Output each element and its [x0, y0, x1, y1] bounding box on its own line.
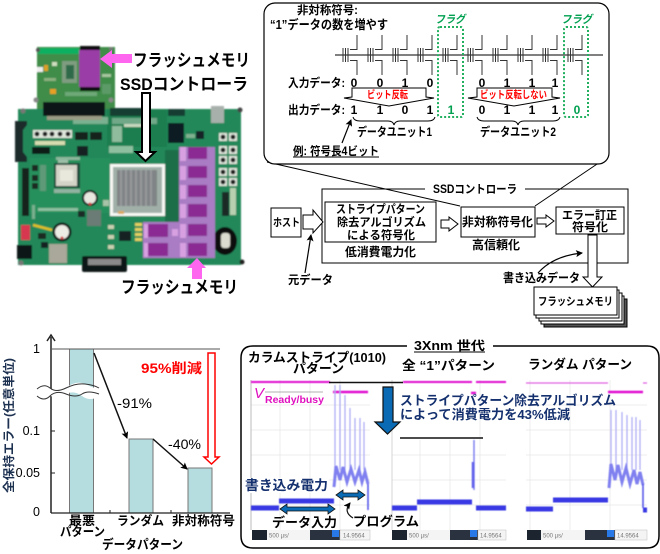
arrow: bit inversion — [344, 88, 434, 106]
output data row: 1 — [377, 103, 384, 117]
callout: 95 percent reduction — [141, 353, 219, 464]
arrow: no bit inversion — [468, 88, 560, 106]
box: stripe pattern removal — [325, 202, 436, 242]
box: error correction: 符号化 — [572, 220, 609, 234]
arrow: bit inversion: ビット反転 — [367, 88, 408, 101]
box: stripe pattern removal: による符号化 — [347, 228, 415, 242]
controller frame — [322, 183, 628, 263]
heat sink module — [110, 164, 165, 216]
axis break — [36, 383, 100, 399]
status bar: 500 µs/ — [409, 534, 429, 540]
diagram: SSD controller flow — [271, 183, 628, 327]
input data row — [288, 75, 559, 90]
input data row: 入力データ: — [288, 75, 345, 90]
arrow: to flash — [583, 235, 602, 287]
top connector — [43, 102, 105, 120]
input data row: 0 — [377, 76, 384, 90]
purple top chip — [79, 46, 100, 91]
x axis title: データパターン — [102, 537, 183, 552]
box: asymmetric coding — [461, 207, 535, 237]
input data row: 1 — [552, 76, 559, 90]
arrow: minus 91 percent: -91% — [117, 396, 152, 411]
box: error correction: エラー訂正 — [562, 209, 617, 222]
arrow: pink to bottom flash memory — [187, 258, 206, 279]
status bar — [392, 530, 506, 540]
label: write data: 書き込みデータ — [503, 270, 580, 285]
bar chart: retention errors — [1, 335, 235, 552]
flag 2: フラグ — [561, 13, 594, 26]
output data row: 1 — [448, 103, 455, 117]
output data row: 1 — [504, 103, 511, 117]
output data row: 0 — [479, 103, 486, 117]
text: increase 1 data: “1”データの数を増やす — [270, 17, 388, 32]
output data row: 1 — [529, 103, 536, 117]
y axis values: 0 — [33, 505, 40, 519]
label: write data — [503, 253, 582, 285]
main board — [17, 106, 244, 266]
label: V ready busy: V — [254, 385, 266, 402]
output data row — [288, 102, 581, 117]
arrow: data input span — [280, 504, 335, 514]
label: original data — [288, 235, 333, 287]
output data row: 出力データ: — [288, 102, 345, 117]
label: data input: データ入力 — [272, 515, 337, 530]
box: host — [271, 208, 301, 237]
label: flash memory top: フラッシュメモリ — [133, 51, 250, 70]
text: 43 percent reduction — [400, 393, 616, 422]
title: column stripe — [248, 350, 386, 376]
input data row: 0 — [427, 76, 434, 90]
input data row: 0 — [351, 76, 358, 90]
left connector — [15, 121, 27, 162]
status bar: 14.9564 — [343, 534, 365, 540]
label: V ready busy: Ready/busy — [265, 395, 324, 406]
label: SSD controller: SSDコントローラ — [120, 75, 248, 94]
label: flash memory bottom: フラッシュメモリ — [121, 278, 238, 297]
flash memory stack — [534, 287, 627, 327]
x axis labels: パターン — [60, 525, 105, 539]
input data row: 1 — [504, 76, 511, 90]
title: random: ランダム パターン — [528, 357, 632, 372]
x axis labels — [60, 513, 235, 539]
callout: 95 percent reduction: 95%削減 — [141, 360, 203, 376]
input data row: 1 — [402, 76, 409, 90]
title: column stripe: パターン — [293, 361, 344, 376]
arrow: code length — [342, 120, 351, 143]
flag 2 — [561, 13, 594, 117]
output data row: 1 — [427, 103, 434, 117]
x axis labels: ランダム — [117, 513, 164, 528]
callout: asymmetric coding — [264, 3, 609, 206]
title: all 1: 全 “1”パターン — [402, 358, 495, 373]
title: column stripe: カラムストライプ(1010) — [248, 350, 386, 365]
oscilloscope 3 — [526, 380, 647, 540]
arrow: host to encoding — [303, 210, 323, 233]
status bar — [252, 530, 370, 540]
y axis values — [16, 342, 40, 519]
output data row: 1 — [351, 103, 358, 117]
box: stripe pattern removal: ストライプパターン — [336, 203, 425, 216]
arrow: power reduction — [375, 387, 400, 434]
input data row: 1 — [529, 76, 536, 90]
text: code length example: 例: 符号長4ビット — [293, 144, 379, 158]
output data row: 0 — [574, 103, 581, 117]
text: low power: 低消費電力化 — [345, 244, 416, 259]
data unit 1: データユニット1 — [357, 124, 432, 139]
flag 1: フラグ — [435, 13, 467, 26]
text: high reliability: 高信頼化 — [472, 237, 520, 252]
label: program: プログラム — [353, 514, 419, 529]
panel: 3Xnm generation waveforms — [241, 339, 659, 548]
arrow: minus 91 percent — [94, 353, 152, 438]
photo: SSD controller board — [15, 46, 250, 297]
label: V ready busy — [254, 385, 324, 406]
oscilloscope 1 — [251, 380, 370, 540]
heading: 3Xnm generation: 3Xnm 世代 — [414, 339, 486, 353]
y axis title: 全保持エラー(任意単位) — [1, 358, 16, 493]
controller frame: SSDコントローラ — [433, 183, 517, 196]
box: error correction — [556, 207, 624, 234]
text: 43 percent reduction: ストライプパターン除去アルゴリズム — [400, 393, 616, 408]
flag 1 — [435, 13, 467, 117]
output data row: 1 — [552, 103, 559, 117]
arrow: program span — [336, 490, 365, 500]
daughter board — [34, 47, 115, 109]
oscilloscope 2 — [392, 380, 506, 540]
label: original data: 元データ — [288, 272, 333, 287]
x axis labels: 最悪 — [69, 514, 96, 528]
arrow: to ECC — [537, 215, 554, 227]
y axis values: 0.1 — [23, 424, 40, 438]
output data row: 0 — [402, 103, 409, 117]
data unit 2 — [477, 117, 560, 139]
text: 43 percent reduction: によって消費電力を43%低減 — [400, 407, 570, 422]
bottom connector — [82, 256, 127, 272]
status bar — [527, 530, 647, 540]
bars — [70, 349, 212, 513]
arrow: to asymmetric — [441, 217, 458, 231]
heading: asymmetric code: 非対称符号: — [297, 3, 358, 17]
flash memory stack: フラッシュメモリ — [538, 295, 613, 308]
data unit 1 — [353, 117, 435, 139]
arrow: to program — [347, 503, 353, 518]
status bar: 14.9564 — [480, 534, 502, 540]
arrow: controller — [136, 93, 155, 161]
arrow: no bit inversion: ビット反転しない — [480, 88, 547, 101]
input data row: 0 — [479, 76, 486, 90]
status bar: 500 µs/ — [269, 534, 289, 540]
y axis values: 1 — [33, 342, 40, 356]
box: stripe pattern removal: 除去アルゴリズム — [337, 215, 426, 229]
axes — [47, 335, 230, 513]
status bar: 500 µs/ — [543, 534, 563, 540]
x axis labels: 非対称符号 — [172, 513, 235, 528]
memory cell string — [335, 35, 603, 75]
status bar: 14.9564 — [617, 534, 639, 540]
y axis values: 0.05 — [16, 466, 40, 480]
box: asymmetric coding: 非対称符号化 — [462, 214, 533, 229]
box: host: ホスト — [273, 216, 300, 229]
label: write power: 書き込み電力 — [245, 477, 328, 493]
data unit 2: データユニット2 — [480, 124, 556, 139]
arrow: minus 40 percent: -40% — [168, 437, 201, 452]
arrow: minus 40 percent — [153, 437, 201, 469]
arrow: pink to top flash memory — [100, 50, 132, 68]
purple flash areas — [143, 147, 215, 258]
black reference lines — [329, 382, 483, 438]
